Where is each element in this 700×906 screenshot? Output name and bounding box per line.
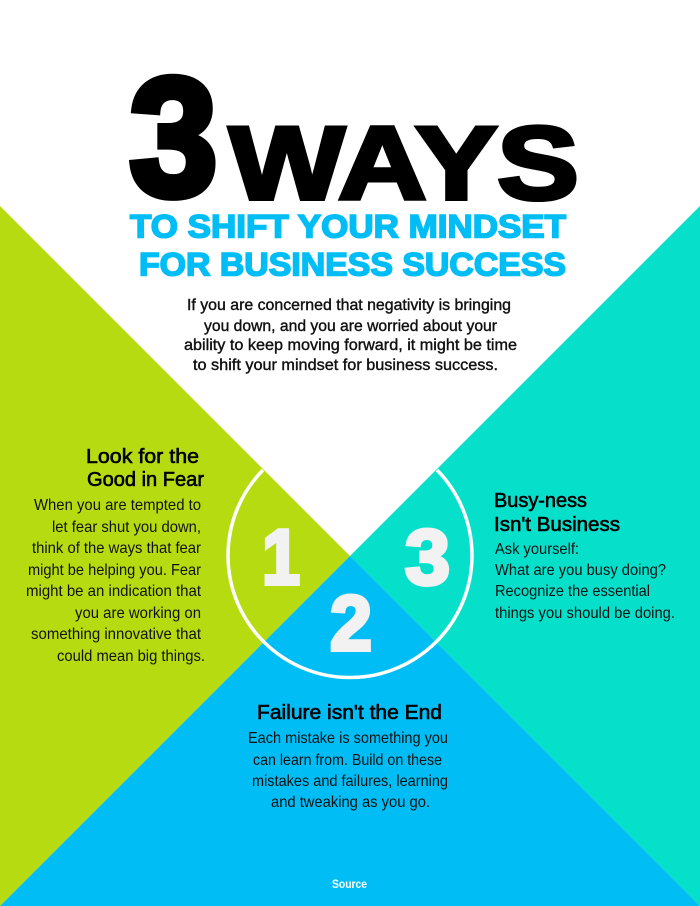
section 3 body (495, 541, 675, 622)
panel: teal triangle (350, 206, 700, 906)
section 3: busy-ness isn't business (494, 490, 675, 622)
title: 3 (130, 43, 218, 231)
section 1 heading: Look for the (86, 446, 199, 468)
intro text: to shift your mindset for business success. (193, 357, 498, 374)
subtitle: FOR BUSINESS SUCCESS (139, 246, 566, 282)
section 1 body (26, 497, 205, 665)
section 1 heading (86, 446, 204, 491)
intro text: you down, and you are worried about your (204, 318, 498, 335)
section 1: look for the good in fear (26, 446, 205, 665)
section 2 body (248, 730, 448, 811)
section 3 heading (494, 490, 620, 536)
section 2: failure isn't the end (248, 702, 448, 811)
panel: blue triangle (0, 556, 700, 906)
section 1 body: something innovative that (31, 626, 202, 643)
title: WAYS (229, 106, 579, 222)
subtitle (130, 208, 566, 282)
section 2 body: Each mistake is something you (248, 730, 448, 747)
section 2 heading: Failure isn't the End (257, 702, 442, 724)
section 1 body: might be helping you. Fear (28, 562, 202, 579)
section 1 body: think of the ways that fear (32, 540, 202, 557)
section 1 body: When you are tempted to (34, 497, 201, 514)
section 1 body: you are working on (75, 605, 201, 622)
section 1 body: could mean big things. (57, 648, 205, 665)
section 1 body: let fear shut you down, (52, 519, 201, 536)
intro text (184, 297, 517, 374)
intro text: ability to keep moving forward, it might be time (184, 337, 517, 354)
section 2 body: mistakes and failures, learning (252, 773, 448, 790)
section 3 body: things you should be doing. (495, 605, 675, 622)
section 1 body: might be an indication that (26, 583, 202, 600)
section 3 heading: Isn't Business (494, 514, 620, 536)
numeral 3: 3 (405, 513, 450, 601)
source link: Source (332, 877, 367, 891)
section 2 body: can learn from. Build on these (253, 752, 442, 769)
title (130, 43, 579, 231)
section 3 body: Ask yourself: (495, 541, 579, 558)
intro text: If you are concerned that negativity is bringing (187, 297, 511, 314)
panel: green triangle (0, 206, 350, 906)
section 1 heading: Good in Fear (87, 469, 204, 491)
circle arc (228, 470, 472, 678)
section 3 body: What are you busy doing? (495, 562, 666, 579)
numeral 1: 1 (262, 513, 300, 601)
subtitle: TO SHIFT YOUR MINDSET (130, 208, 566, 244)
numeral 2: 2 (330, 579, 372, 667)
section 2 body: and tweaking as you go. (271, 794, 430, 811)
section 3 body: Recognize the essential (495, 583, 650, 600)
section 3 heading: Busy-ness (494, 490, 587, 512)
